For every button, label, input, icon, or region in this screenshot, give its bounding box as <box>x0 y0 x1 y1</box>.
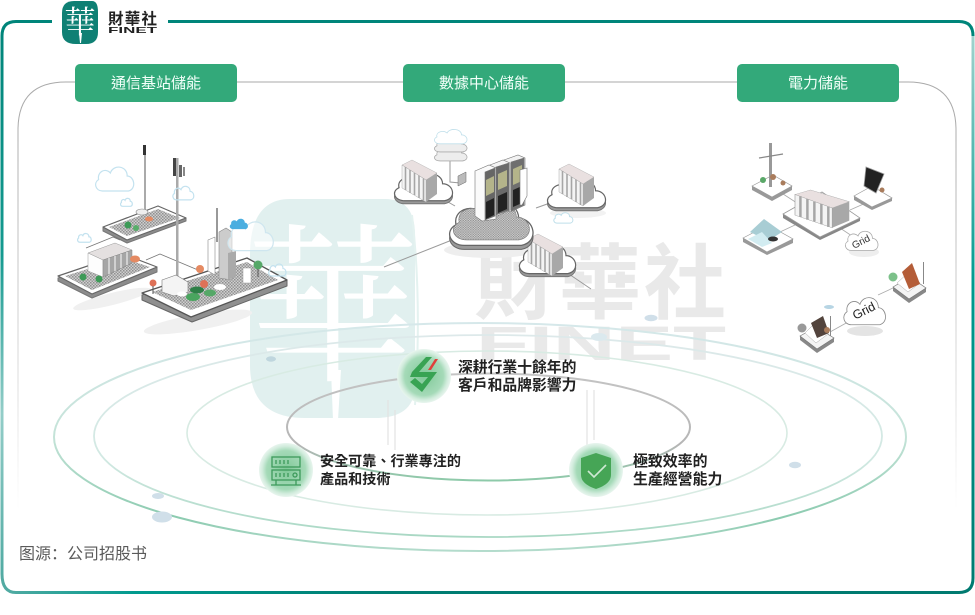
feature: efficient operations <box>569 443 722 497</box>
tab: telecom base station storage: 通信基站儲能 <box>111 75 201 92</box>
text: efficient operations: 生產經營能力 <box>633 470 722 488</box>
text: customer and brand influence: 深耕行業十餘年的 <box>458 358 576 376</box>
watermark: Hua logo: 華 <box>247 171 419 418</box>
cloud: grid lower: Grid <box>850 299 878 323</box>
text: safe and reliable products: 安全可靠、行業專注的 <box>320 453 461 469</box>
tab: telecom base station storage <box>75 64 237 102</box>
solar tile <box>854 167 892 210</box>
illustration: telecom base stations <box>58 145 287 339</box>
watermark: company name: FINET <box>476 318 726 371</box>
cloud: grid upper <box>845 231 879 257</box>
feature: customer and brand influence <box>397 349 576 403</box>
server racks <box>475 155 527 221</box>
connector lines <box>780 192 893 332</box>
watermark: company name <box>474 239 726 371</box>
cloud: right batteries <box>548 164 606 211</box>
illustration: data centre <box>384 129 606 289</box>
feature: safe and reliable products <box>259 443 461 497</box>
icon: junction box <box>458 172 466 186</box>
platform: city <box>142 158 287 322</box>
text: customer and brand influence: 客戶和品牌影響力 <box>458 376 576 394</box>
concentric orbit rings <box>54 323 906 551</box>
tab: data centre storage: 數據中心儲能 <box>439 75 529 92</box>
cloud: centre platform <box>450 202 533 249</box>
logo <box>62 0 159 44</box>
company wordmark: 財華社 <box>108 9 157 28</box>
text: efficient operations: 極致效率的 <box>633 452 708 470</box>
tab: power storage: 電力儲能 <box>788 75 848 92</box>
text: safe and reliable products: 產品和技術 <box>320 471 390 487</box>
cloud stack <box>434 129 467 161</box>
platform: top <box>103 145 186 243</box>
panel outline <box>18 82 956 510</box>
shadows <box>72 284 254 339</box>
icons: sky clouds <box>78 167 286 276</box>
icon: server <box>259 443 313 497</box>
cloud: grid upper: Grid <box>850 233 872 252</box>
icon: company mark <box>397 349 451 403</box>
decorative dots <box>152 315 801 522</box>
source note: 图源：公司招股书 <box>19 545 147 563</box>
house: right <box>888 262 926 303</box>
central battery platform <box>783 190 860 240</box>
connector lines <box>384 158 591 289</box>
tab: data centre storage <box>403 64 565 102</box>
company wordmark <box>108 9 159 35</box>
illustration: power storage <box>743 143 926 353</box>
cloud: grid lower <box>844 298 886 336</box>
house: left <box>798 305 834 353</box>
cloud: bottom batteries <box>519 234 576 277</box>
company wordmark: FINET <box>108 25 159 35</box>
icon: small blue cloud <box>554 213 573 223</box>
battery block <box>88 243 132 277</box>
icon: shield <box>569 443 623 497</box>
icon: blue cloud <box>230 219 248 229</box>
hydro tile <box>743 219 793 255</box>
vertical light streaks <box>388 390 594 450</box>
wind tile <box>752 143 792 201</box>
cloud: left batteries <box>395 160 453 204</box>
platform: battery <box>58 237 198 298</box>
watermark: company name: 財華社 <box>474 239 726 330</box>
tab: power storage <box>737 64 899 102</box>
